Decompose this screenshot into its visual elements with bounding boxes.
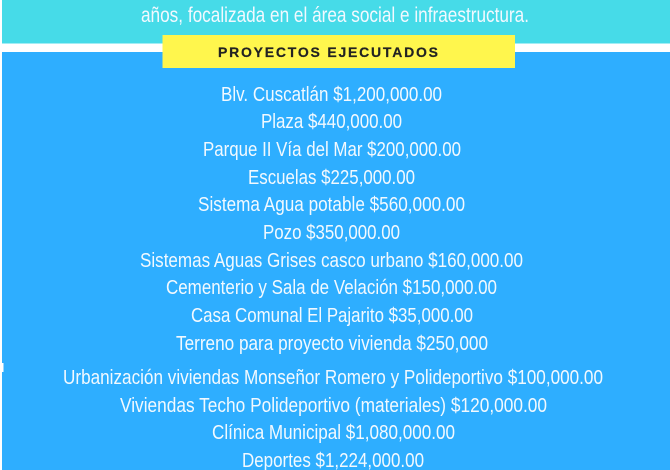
project lines: Clínica Municipal $1,080,000.00: [212, 422, 455, 444]
project lines: Cementerio y Sala de Velación $150,000.00: [166, 277, 497, 299]
project lines: Terreno para proyecto vivienda $250,000: [176, 333, 488, 355]
heading: proyectos ejecutados: PROYECTOS EJECUTADOS: [218, 44, 438, 60]
project lines: [63, 84, 603, 470]
heading: proyectos ejecutados: [162, 35, 515, 68]
project lines: Blv. Cuscatlán $1,200,000.00: [221, 84, 442, 106]
project lines: Casa Comunal El Pajarito $35,000.00: [191, 305, 473, 327]
project lines: Escuelas $225,000.00: [248, 167, 415, 189]
panel: intro banner: [2, 0, 670, 44]
project lines: Sistema Agua potable $560,000.00: [198, 194, 465, 216]
project lines: Plaza $440,000.00: [261, 111, 402, 133]
text: intro closing line: años, focalizada en el área social e infraestructura.: [141, 4, 529, 27]
project lines: Viviendas Techo Polideportivo (materiales) $120,000.00: [120, 395, 547, 417]
project lines: Pozo $350,000.00: [263, 222, 400, 244]
project lines: Sistemas Aguas Grises casco urbano $160,000.00: [140, 250, 523, 272]
project lines: Parque II Vía del Mar $200,000.00: [203, 139, 461, 161]
